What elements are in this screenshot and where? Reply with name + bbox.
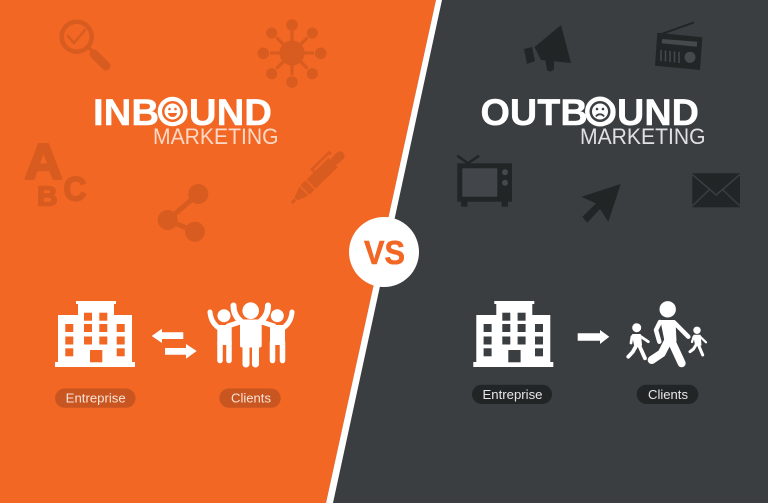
icon: megaphone: [524, 25, 571, 71]
label: Entreprise pill: Entreprise: [66, 390, 126, 406]
icon: enterprise building: [473, 301, 553, 367]
label: Clients pill: Clients: [648, 387, 688, 402]
label: Entreprise pill: [472, 385, 552, 404]
icon: magnifier: [62, 22, 106, 66]
title: INBOUND: INBOUND: [93, 92, 272, 133]
label: Entreprise pill: Entreprise: [482, 387, 542, 402]
icon: television: [457, 156, 512, 207]
big walker: [652, 301, 688, 363]
icon: walking clients: [628, 301, 706, 363]
icon: one-way arrow: [578, 330, 609, 344]
icon: ABC letters: B: [37, 180, 58, 212]
icon: envelope: [692, 173, 740, 207]
icon: enterprise building: [55, 301, 135, 367]
icon: ABC letters: [24, 134, 86, 212]
label: Clients pill: [637, 385, 698, 404]
icon: cursor arrow: [581, 184, 621, 223]
icon: share: [158, 184, 208, 242]
label: Entreprise pill: [55, 388, 136, 408]
icon: ABC letters: C: [64, 170, 86, 208]
icon: network hub: [258, 19, 327, 88]
icon: sad face: [585, 96, 615, 126]
icon: exchange arrows: [152, 329, 197, 359]
icon: radio: [655, 23, 702, 70]
small walker right: [690, 327, 706, 355]
icon: pen: [285, 146, 348, 208]
subtitle: MARKETING: MARKETING: [153, 124, 278, 149]
icon: happy clients group: [210, 302, 292, 364]
panel: inbound orange background: [0, 0, 436, 503]
divider: [326, 0, 442, 503]
label: Clients pill: Clients: [231, 390, 271, 406]
icon: smiley face: [158, 97, 187, 126]
label: Clients pill: [219, 388, 281, 408]
badge: VS: [349, 217, 419, 287]
subtitle: MARKETING: MARKETING: [580, 124, 706, 149]
icon: ABC letters: A: [24, 134, 62, 190]
small walker left: [628, 323, 648, 358]
title: OUTBOUND: OUTBOUND: [480, 92, 699, 133]
badge: VS: VS: [364, 234, 405, 271]
